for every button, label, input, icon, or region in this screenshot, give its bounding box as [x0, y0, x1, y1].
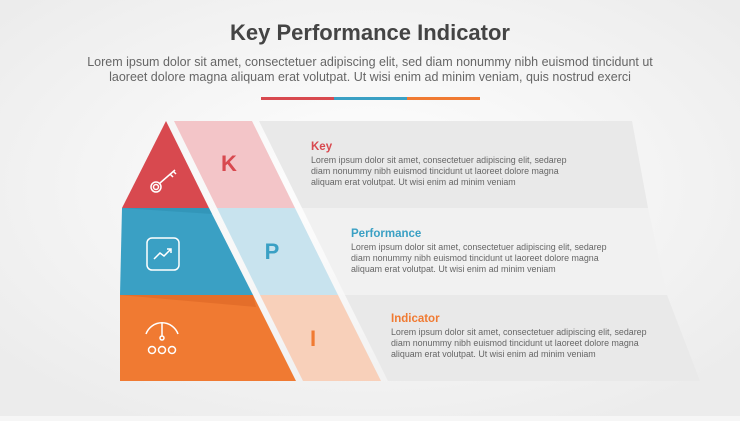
text: key: aliquam erat volutpat. Ut wisi enim ad minim veniam [311, 177, 516, 187]
text: key: Lorem ipsum dolor sit amet, consectetuer adipiscing elit, sedarep [311, 155, 567, 165]
subtitle: Lorem ipsum dolor sit amet, consectetuer adipiscing elit, sed diam nonummy nibh euismod tincidunt ut [87, 55, 653, 69]
text: key: diam nonummy nibh euismod tincidunt ut laoreet dolore magna [311, 166, 559, 176]
text: performance [351, 228, 607, 274]
text: indicator: diam nonummy nibh euismod tincidunt ut laoreet dolore magna [391, 338, 639, 348]
text: indicator: Indicator [391, 313, 440, 325]
letter strip: K [221, 151, 237, 176]
text: performance: diam nonummy nibh euismod tincidunt ut laoreet dolore magna [351, 253, 599, 263]
text: performance: Performance [351, 228, 421, 240]
letter strip: I [310, 326, 316, 351]
text: performance: Lorem ipsum dolor sit amet, consectetuer adipiscing elit, sedarep [351, 242, 607, 252]
letter strip [174, 121, 381, 381]
subtitle: laoreet dolore magna aliquam erat volutpat. Ut wisi enim ad minim veniam, quis nostrud exerci [109, 70, 631, 84]
subtitle [87, 55, 653, 84]
gray text bands [259, 121, 700, 381]
title: Key Performance Indicator [230, 20, 510, 45]
text: indicator: aliquam erat volutpat. Ut wisi enim ad minim veniam [391, 349, 596, 359]
text: indicator: Lorem ipsum dolor sit amet, consectetuer adipiscing elit, sedarep [391, 327, 647, 337]
letter strip: P [265, 239, 279, 264]
text: performance: aliquam erat volutpat. Ut wisi enim ad minim veniam [351, 264, 556, 274]
color divider [261, 97, 480, 100]
text: key: Key [311, 141, 333, 153]
text: key [311, 141, 567, 187]
text: indicator [391, 313, 647, 359]
icon: key [151, 170, 176, 192]
icon: gauge [146, 323, 178, 354]
pyramid [120, 121, 296, 381]
icon: chart [147, 238, 179, 270]
